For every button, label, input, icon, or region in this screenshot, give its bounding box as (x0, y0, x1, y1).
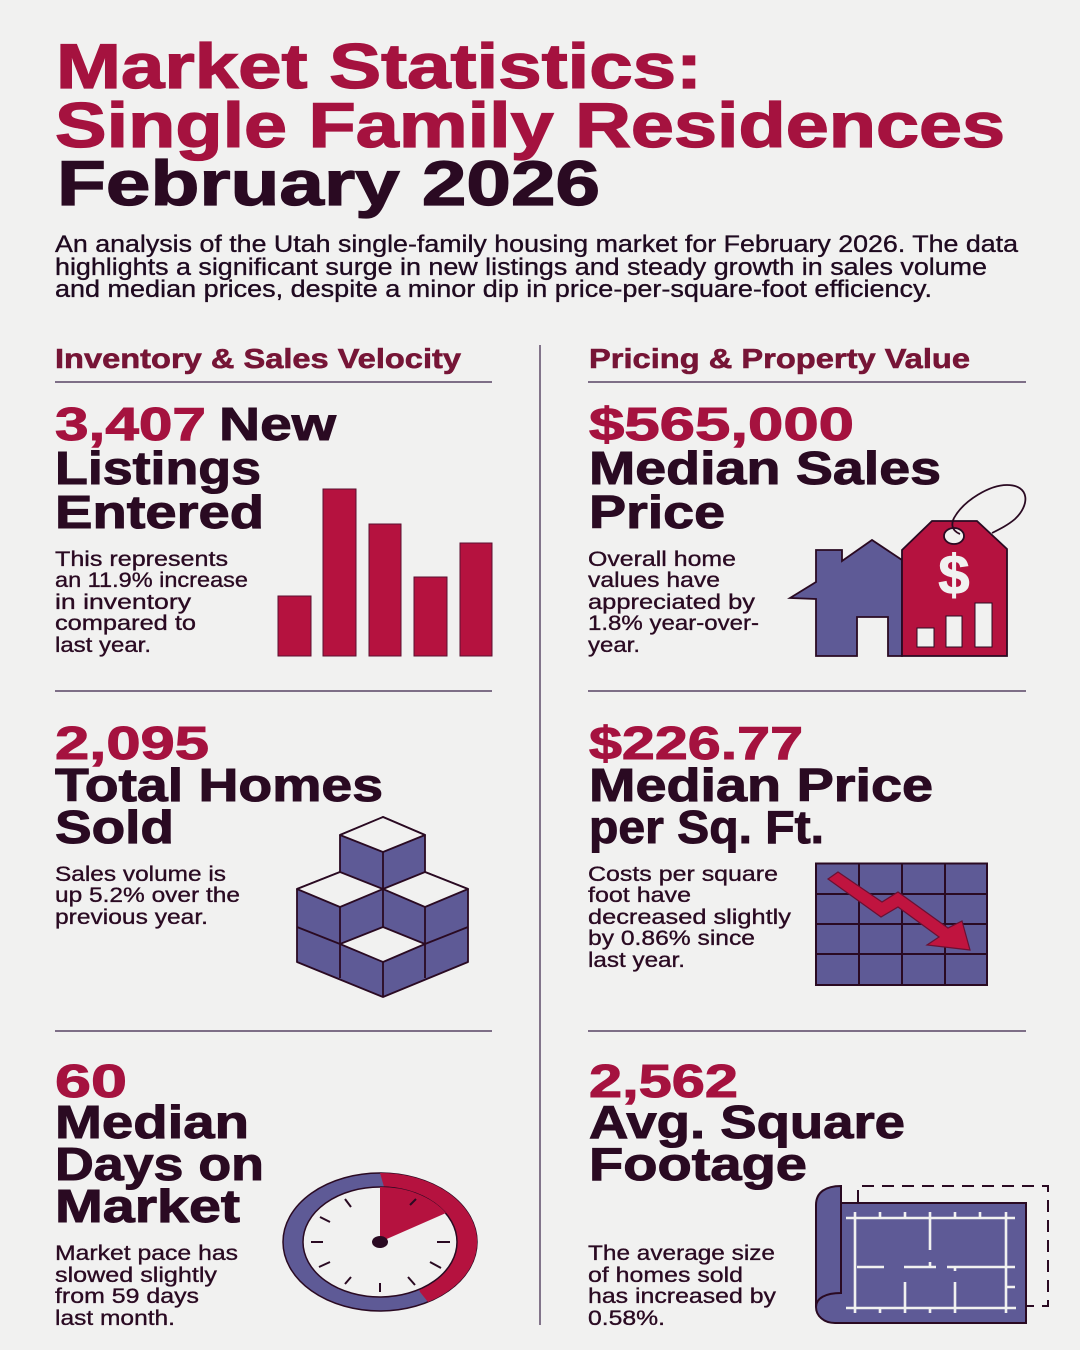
stat: new listings (55, 398, 336, 538)
description: median days on market (55, 1241, 238, 1330)
description: median days on market: from 59 days (55, 1284, 199, 1308)
icon: house with price tag: $ (938, 543, 970, 606)
description: new listings: an 11.9% increase (55, 568, 248, 592)
left column heading: Inventory & Sales Velocity (55, 343, 461, 374)
stat: average square footage: Footage (589, 1138, 807, 1190)
right column heading: Pricing & Property Value (589, 343, 970, 374)
panel: median sales price (588, 398, 1025, 657)
stat: median price per square foot: Median Price (589, 759, 933, 811)
description: average square footage: of homes sold (588, 1263, 743, 1287)
stat: new listings: Listings (55, 442, 261, 494)
panel: new listings (55, 398, 492, 657)
icon: clock (283, 1173, 477, 1311)
stat: median sales price: Median Sales (589, 442, 941, 494)
panel: median days on market (55, 1055, 477, 1330)
description: median sales price: Overall home (588, 547, 736, 571)
stat: median price per square foot (589, 717, 933, 853)
description: average square footage (588, 1241, 776, 1330)
description: total homes sold: previous year. (55, 905, 208, 929)
stat: median days on market: 60 (55, 1055, 127, 1107)
description: median sales price: appreciated by (588, 590, 755, 614)
description: median price per square foot (588, 862, 791, 972)
description: median price per square foot: last year. (588, 948, 685, 972)
stat: median days on market (55, 1055, 264, 1232)
description: median days on market: last month. (55, 1306, 175, 1330)
stat: median price per square foot: $226.77 (589, 717, 803, 769)
stat: new listings: Entered (55, 486, 264, 538)
title: Single Family Residences (55, 91, 1005, 161)
bar chart (278, 489, 492, 656)
intro text: highlights a significant surge in new listings and steady growth in sales volume (55, 254, 987, 281)
icon: house with price tag (790, 485, 1025, 656)
stat: average square footage (589, 1055, 905, 1190)
stat: median sales price: Price (589, 486, 725, 538)
description: median days on market: Market pace has (55, 1241, 238, 1265)
icon: stacked cubes (297, 817, 468, 997)
description: new listings: compared to (55, 611, 196, 635)
description: new listings: last year. (55, 633, 151, 657)
stat: median sales price: $565,000 (589, 398, 854, 450)
description: median price per square foot: Costs per square (588, 862, 778, 886)
stat: new listings: 3,407 (55, 398, 206, 450)
description: new listings (55, 547, 248, 657)
description: total homes sold: up 5.2% over the (55, 883, 240, 907)
description: median price per square foot: by 0.86% since (588, 926, 755, 950)
description: median sales price: values have (588, 568, 720, 592)
description: median price per square foot: decreased slightly (588, 905, 791, 929)
stat: total homes sold: Sold (55, 801, 174, 853)
panel: average square footage (588, 1055, 1048, 1330)
panel: total homes sold (55, 717, 468, 997)
description: median days on market: slowed slightly (55, 1263, 217, 1287)
description: median sales price (588, 547, 759, 657)
intro text: and median prices, despite a minor dip in price-per-square-foot efficiency. (55, 276, 932, 303)
stat: median days on market: Market (55, 1180, 240, 1232)
intro text: An analysis of the Utah single-family housing market for February 2026. The data (55, 231, 1019, 258)
description: new listings: This represents (55, 547, 228, 571)
stat: total homes sold: 2,095 (55, 717, 209, 769)
icon: falling price grid chart (816, 864, 987, 985)
description: average square footage: 0.58%. (588, 1306, 665, 1330)
stat: new listings: New (219, 398, 336, 450)
stat: total homes sold: Total Homes (55, 759, 383, 811)
description: median sales price: year. (588, 633, 640, 657)
description: total homes sold: Sales volume is (55, 862, 226, 886)
stat: median days on market: Days on (55, 1138, 264, 1190)
description: average square footage: The average size (588, 1241, 775, 1265)
stat: average square footage: 2,562 (589, 1055, 738, 1107)
stat: total homes sold (55, 717, 383, 853)
panel: median price per square foot (588, 717, 987, 985)
title: Market Statistics: (56, 32, 702, 102)
description: total homes sold (55, 862, 240, 929)
title (55, 32, 1005, 219)
description: average square footage: has increased by (588, 1284, 776, 1308)
stat: median price per square foot: per Sq. Ft. (589, 801, 824, 853)
icon: blueprint floor plan (816, 1186, 1048, 1323)
stat: median sales price (589, 398, 941, 538)
description: median sales price: 1.8% year-over- (588, 611, 759, 635)
intro text (55, 231, 1019, 303)
stat: average square footage: Avg. Square (589, 1096, 905, 1148)
title: February 2026 (57, 149, 600, 219)
stat: median days on market: Median (55, 1096, 249, 1148)
description: new listings: in inventory (55, 590, 191, 614)
description: median price per square foot: foot have (588, 883, 691, 907)
